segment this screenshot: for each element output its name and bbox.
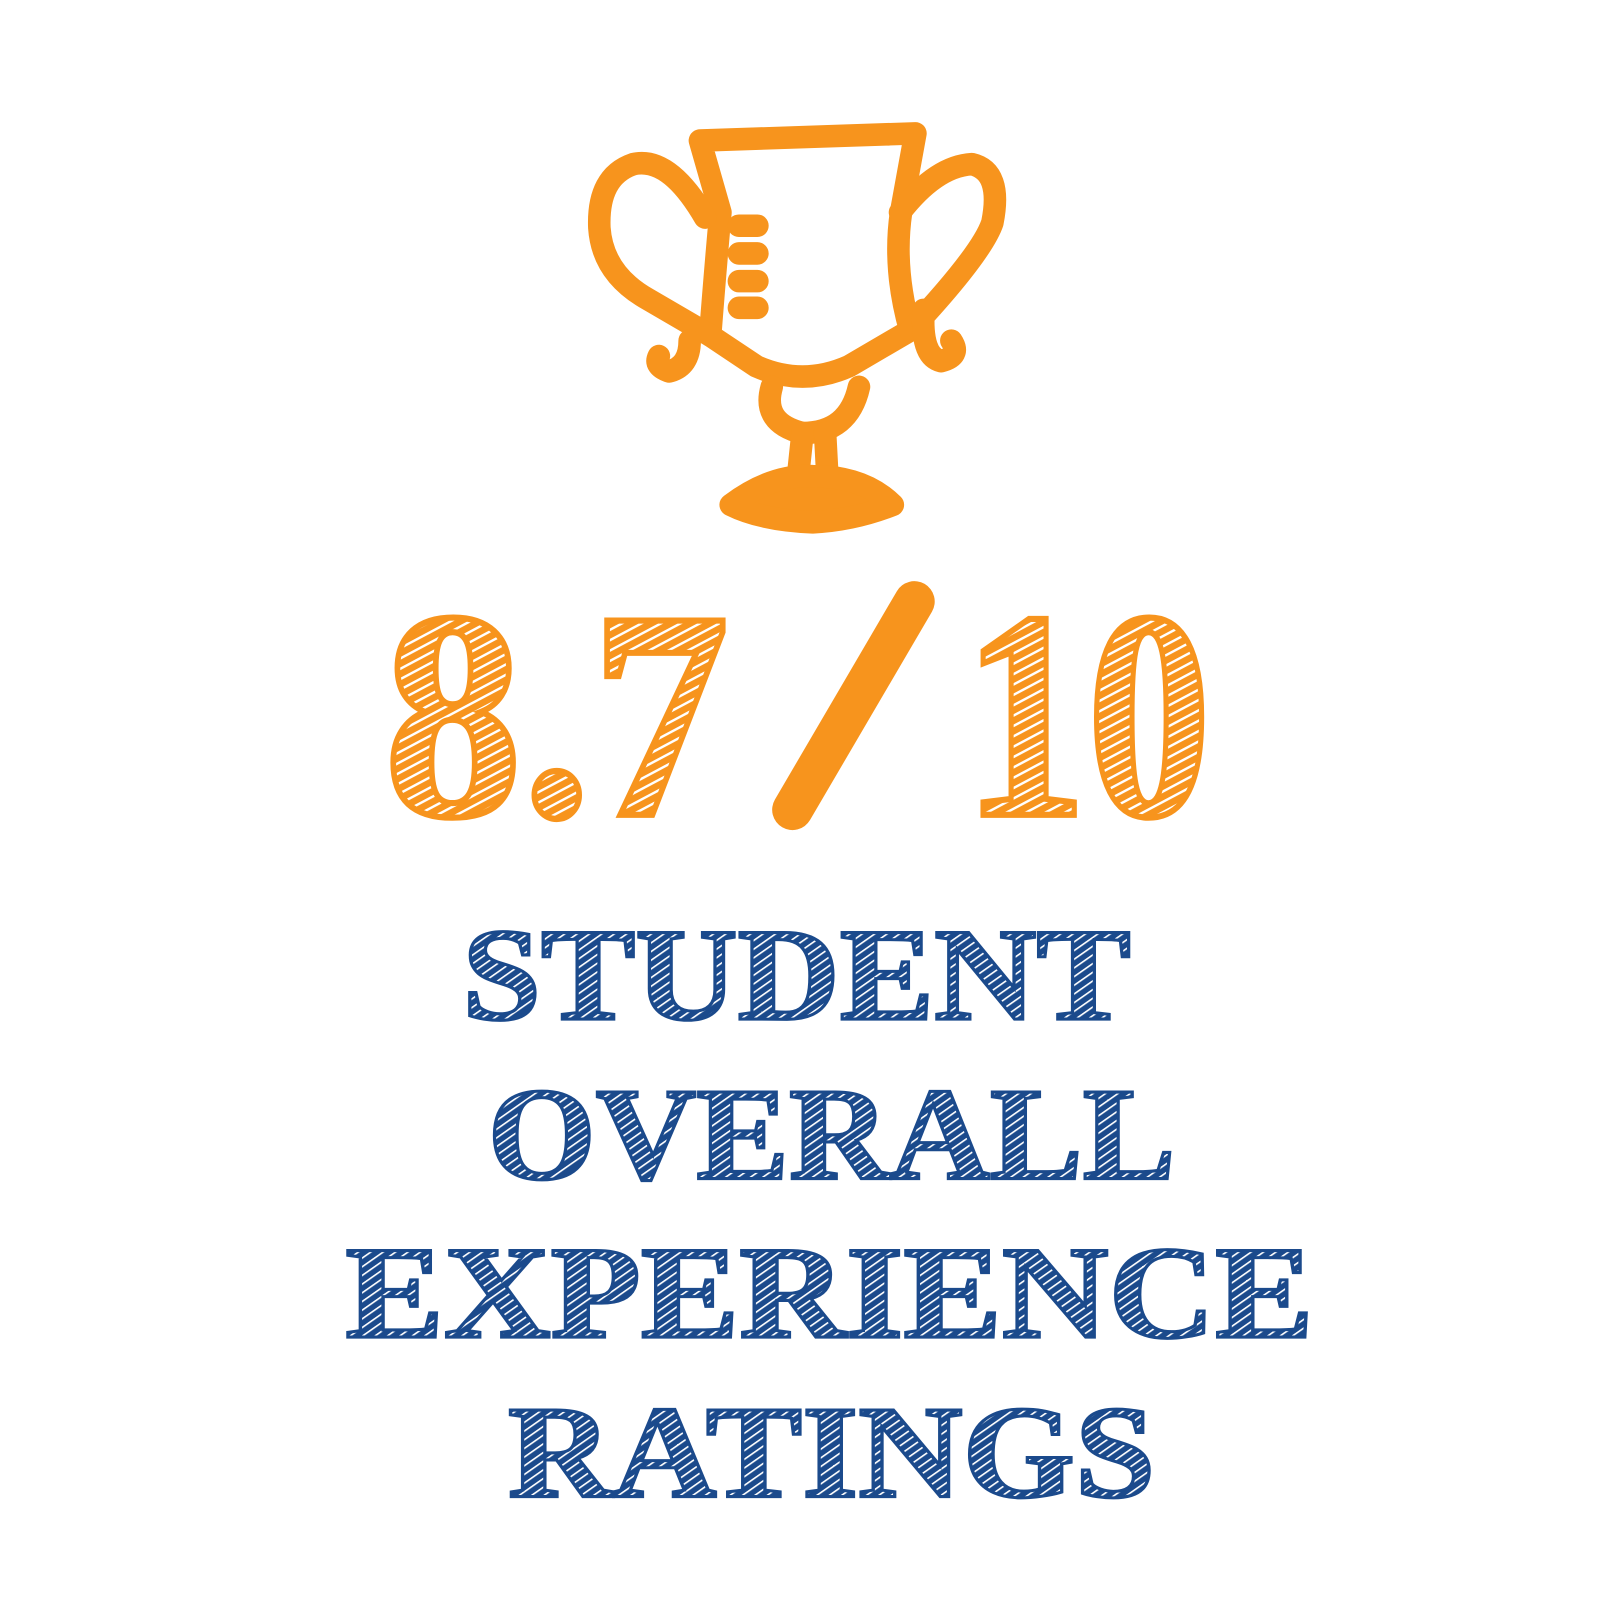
title: student overall experience ratings: EXPERIENCE <box>345 1219 1314 1366</box>
score: 8.7/10 <box>384 552 1211 880</box>
title: student overall experience ratings: OVERALL <box>488 1061 1176 1208</box>
slash <box>792 601 914 810</box>
title: student overall experience ratings: STUDENT <box>462 901 1131 1048</box>
icon: trophy <box>599 133 995 522</box>
text: 8.7: 8.7 <box>384 552 729 880</box>
title: student overall experience ratings <box>345 901 1314 1526</box>
text: 10: 10 <box>963 552 1211 880</box>
title: student overall experience ratings: RATINGS <box>508 1379 1155 1526</box>
